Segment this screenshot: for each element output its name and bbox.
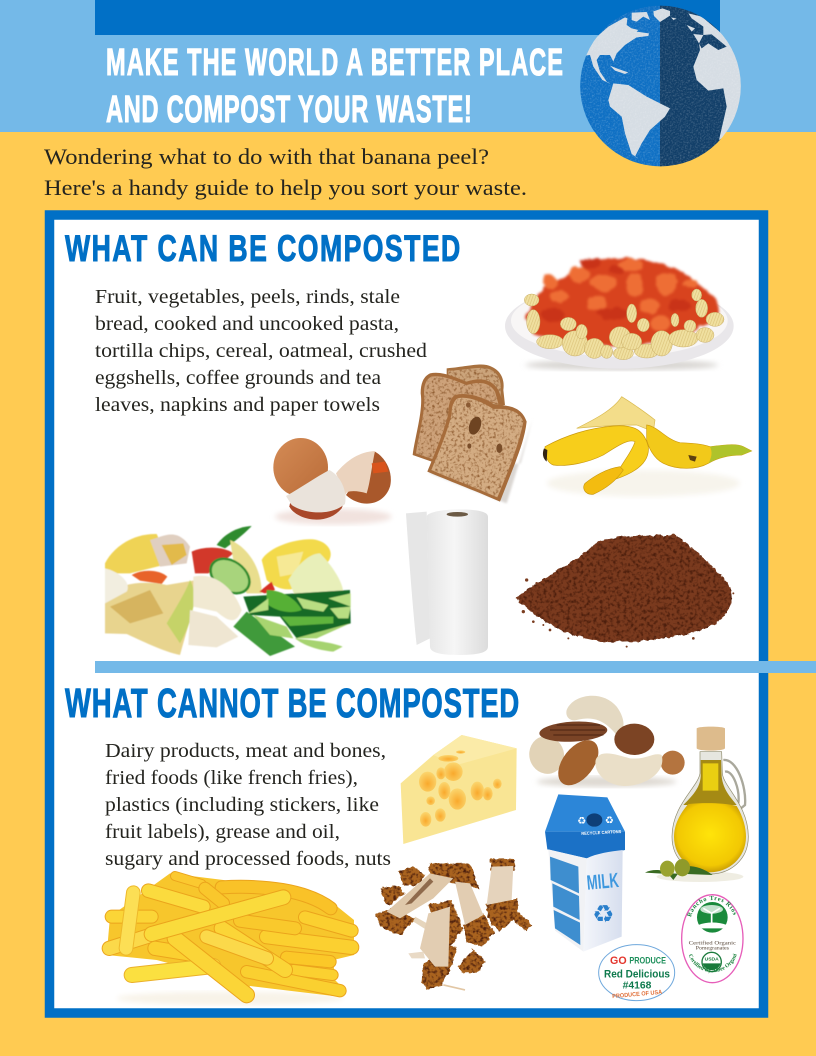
sticker: go produce apple label: Red Delicious bbox=[604, 969, 670, 981]
icon: globe bbox=[580, 6, 741, 166]
icon: milk carton: ♻ bbox=[592, 900, 614, 929]
sticker: go produce apple label: GO bbox=[610, 955, 627, 967]
icon: milk carton bbox=[545, 794, 625, 952]
title bbox=[106, 40, 563, 130]
sticker: certified organic label: Pomegranates bbox=[696, 946, 729, 952]
header band: light blue bbox=[0, 0, 816, 132]
icon: swiss cheese bbox=[401, 735, 517, 844]
sticker: go produce apple label: PRODUCE OF USA bbox=[612, 990, 663, 1000]
sticker: certified organic label: Certified Organic bbox=[689, 939, 737, 946]
intro text: Here's a handy guide to help you sort your waste. bbox=[44, 175, 527, 200]
text block: non-compostable items: fried foods (like french fries), bbox=[105, 767, 358, 789]
icon: vegetable scraps bbox=[105, 526, 351, 656]
sticker: go produce apple label: #4168 bbox=[623, 980, 652, 991]
icon: chicken bones bbox=[375, 858, 532, 990]
icon: milk carton: ♻ bbox=[577, 816, 586, 827]
intro text: Wondering what to do with that banana peel? bbox=[44, 144, 489, 169]
text block: non-compostable items: plastics (including stickers, like bbox=[105, 794, 379, 816]
icon: coffee grounds bbox=[516, 534, 734, 648]
sticker: certified organic label: USDA bbox=[705, 957, 719, 963]
sticker: certified organic label: Rancho Tres Rios bbox=[687, 896, 736, 918]
icon: mixed nuts bbox=[525, 696, 685, 793]
icon: banana peel bbox=[543, 397, 752, 497]
icon: broken egg shells bbox=[273, 438, 392, 525]
icon: paper towel roll bbox=[406, 509, 488, 655]
heading: what cannot be composted: WHAT CANNOT BE COMPOSTED bbox=[65, 681, 519, 726]
title: MAKE THE WORLD A BETTER PLACE bbox=[106, 40, 563, 83]
divider bar bbox=[95, 661, 816, 673]
panel: composting guide bbox=[50, 215, 764, 1013]
text block: compostable items bbox=[95, 286, 427, 416]
text block: compostable items: eggshells, coffee grounds and tea bbox=[95, 367, 381, 389]
heading: what can be composted: WHAT CAN BE COMPOSTED bbox=[65, 228, 460, 269]
text block: non-compostable items: sugary and processed foods, nuts bbox=[105, 848, 391, 870]
sticker: certified organic label: Certified By Albee Organic bbox=[689, 954, 737, 974]
icon: milk carton: MILK bbox=[586, 869, 620, 895]
text block: compostable items: bread, cooked and uncooked pasta, bbox=[95, 313, 399, 335]
sticker: certified organic label bbox=[681, 894, 744, 984]
text block: compostable items: tortilla chips, cereal, oatmeal, crushed bbox=[95, 340, 427, 362]
text block: compostable items: Fruit, vegetables, peels, rinds, stale bbox=[95, 286, 400, 308]
icon: milk carton: RECYCLE CARTONS bbox=[581, 829, 621, 836]
sticker: go produce apple label: PRODUCE bbox=[629, 955, 666, 965]
text block: non-compostable items: fruit labels), grease and oil, bbox=[105, 821, 340, 843]
icon: olive oil bottle bbox=[645, 727, 748, 882]
text block: non-compostable items bbox=[105, 740, 391, 870]
header accent: dark blue bar bbox=[95, 0, 720, 35]
text block: compostable items: leaves, napkins and paper towels bbox=[95, 394, 380, 416]
sticker: go produce apple label bbox=[599, 945, 675, 1001]
icon: bread slices bbox=[413, 365, 533, 503]
title: AND COMPOST YOUR WASTE! bbox=[106, 87, 472, 130]
icon: pasta plate bbox=[505, 257, 734, 370]
icon: milk carton: ♻ bbox=[605, 815, 614, 826]
intro text bbox=[44, 144, 527, 200]
text block: non-compostable items: Dairy products, meat and bones, bbox=[105, 740, 386, 762]
icon: french fries bbox=[107, 873, 354, 1005]
